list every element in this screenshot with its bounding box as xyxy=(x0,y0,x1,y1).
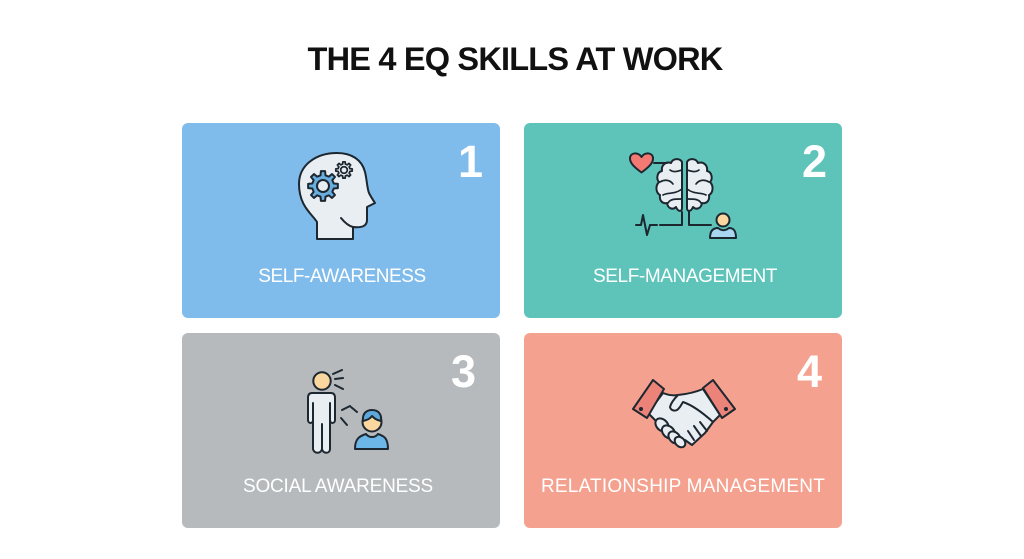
icon: standing person and seated observer xyxy=(308,370,388,453)
panel: relationship management xyxy=(524,333,842,528)
panel: self-awareness xyxy=(182,123,500,318)
label: self-management: SELF-MANAGEMENT xyxy=(593,266,777,287)
number 1: 1 xyxy=(458,136,483,187)
panel: self-management xyxy=(524,123,842,318)
title: THE 4 EQ SKILLS AT WORK xyxy=(308,41,722,77)
number 4: 4 xyxy=(797,346,822,397)
icon: brain with heart, pulse and person xyxy=(630,153,736,238)
label: relationship management: RELATIONSHIP MANAGEMENT xyxy=(541,476,825,497)
label: social awareness: SOCIAL AWARENESS xyxy=(243,476,433,497)
icon: head with gears xyxy=(299,153,375,239)
icon: handshake xyxy=(633,380,735,449)
label: self-awareness: SELF-AWARENESS xyxy=(258,266,426,287)
number 3: 3 xyxy=(451,346,476,397)
panel: social awareness xyxy=(182,333,500,528)
number 2: 2 xyxy=(802,136,827,187)
